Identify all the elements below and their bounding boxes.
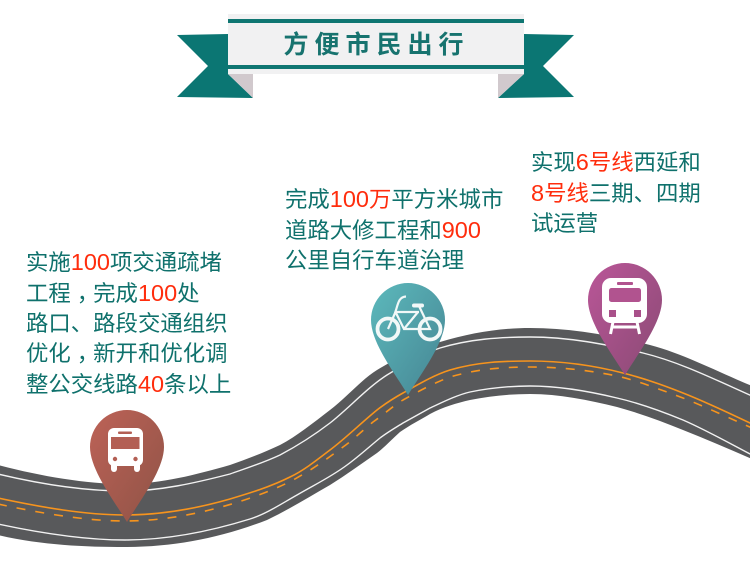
- title: 方便市民出行: [283, 25, 470, 61]
- banner right fold: [498, 74, 524, 98]
- banner bottom stripe: [228, 65, 524, 69]
- text: road repair: 完成100万平方米城市: [285, 186, 503, 212]
- text: road works: 整公交线路40条以上: [26, 371, 231, 397]
- text: metro: 试运营: [531, 211, 598, 236]
- road upper white line: [0, 337, 750, 491]
- banner right tail: [498, 34, 574, 98]
- text: road repair: 公里自行车道治理: [285, 248, 464, 273]
- banner left tail: [177, 34, 253, 98]
- text: road repair: 道路大修工程和900: [285, 217, 481, 243]
- banner top stripe: [228, 19, 524, 23]
- banner body: [228, 14, 524, 74]
- text: metro: 实现6号线西延和: [531, 149, 701, 175]
- text: road works: 优化 ，新开和优化调: [26, 341, 228, 366]
- text: metro: [531, 149, 701, 236]
- text: road works: 工程 ，完成100处: [26, 280, 200, 306]
- road orange dashed line: [0, 367, 750, 521]
- road surface: [0, 328, 750, 547]
- text: road works: 实施100项交通疏堵: [26, 249, 222, 275]
- road lower white line: [0, 386, 750, 540]
- text: road works: 路口、路段交通组织: [26, 311, 228, 336]
- text: metro: 8号线三期、四期: [531, 180, 701, 206]
- road orange solid line: [0, 361, 750, 515]
- text: road works: [26, 249, 231, 397]
- banner left fold: [228, 74, 253, 98]
- text: road repair: [285, 186, 503, 273]
- banner: [177, 14, 574, 98]
